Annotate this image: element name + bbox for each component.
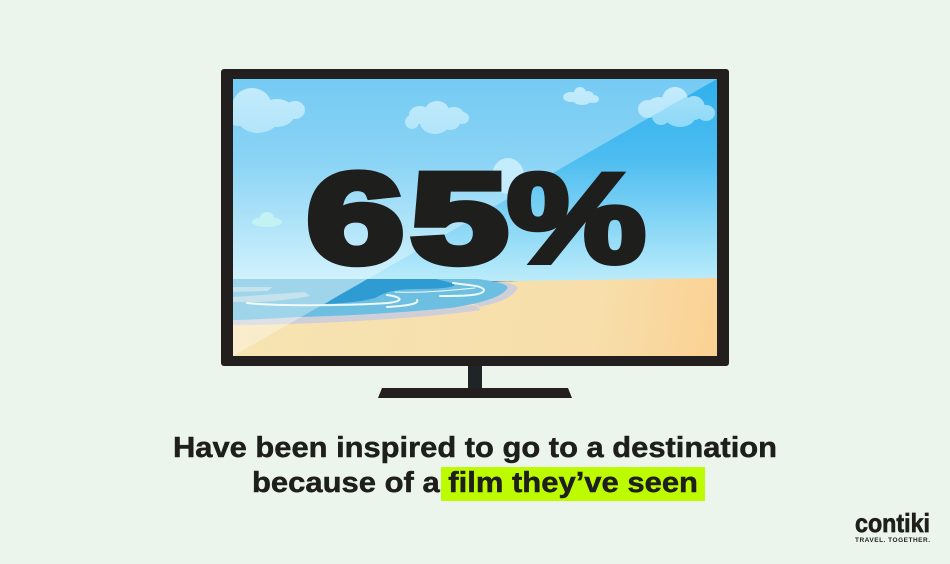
percent sign: %: [507, 148, 646, 290]
television: [221, 69, 729, 398]
deep water: [325, 279, 454, 304]
big percentage: [307, 148, 646, 290]
cloud top left: [228, 88, 305, 133]
faint cloud left: [252, 212, 282, 227]
cloud small top: [563, 87, 599, 105]
white waves: [247, 283, 484, 307]
highlight behind text: [441, 467, 705, 501]
tv frame: [221, 69, 729, 366]
tv stand neck: [468, 364, 482, 390]
sea: [233, 279, 508, 320]
sky: [233, 79, 717, 281]
cloud centre: [405, 101, 469, 134]
logo tagline: TRAVEL. TOGETHER.: [855, 537, 930, 544]
tv stand base: [378, 388, 572, 398]
digit 6: 6: [307, 148, 404, 290]
cloud top right: [638, 87, 715, 127]
wet sand edge: [233, 281, 517, 325]
glare: [233, 79, 717, 356]
sand: [233, 278, 717, 356]
heading line 1: Have been inspired to go to a destination: [173, 432, 777, 464]
shallow foam: [233, 287, 310, 302]
digit 5: 5: [411, 148, 508, 290]
heading line 2: because of a film they’ve seen: [252, 467, 698, 499]
cloud behind number: [492, 158, 524, 194]
logo: [855, 508, 930, 544]
tv screen beach scene: [228, 79, 717, 356]
logo wordmark: contiki: [855, 508, 930, 538]
